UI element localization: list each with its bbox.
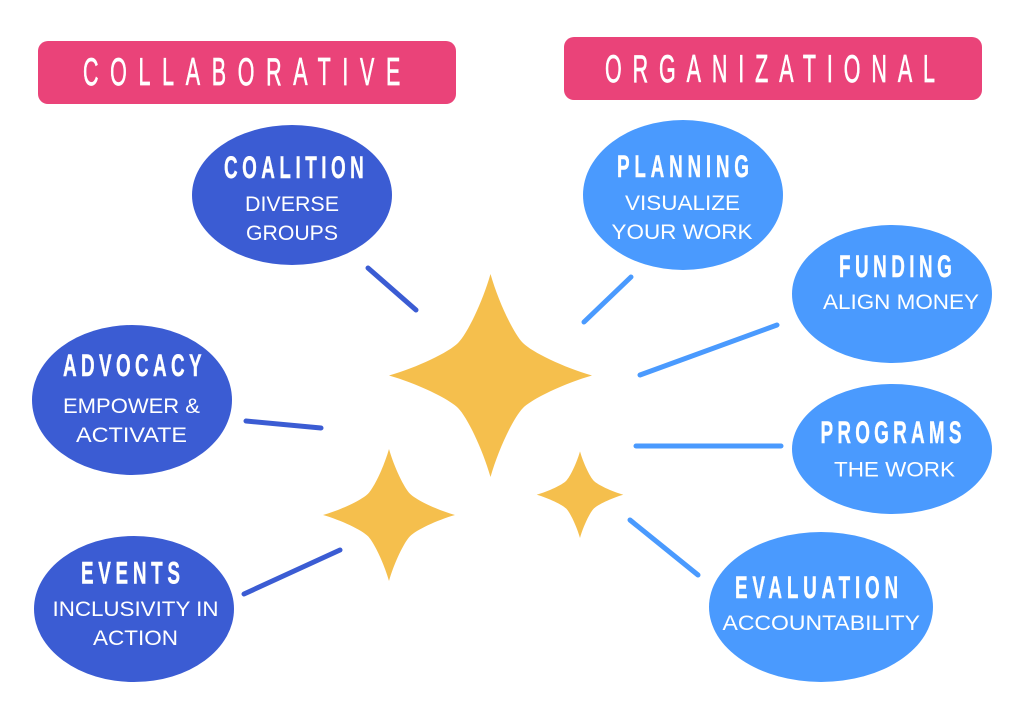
heading: coalition: COALITION — [224, 149, 364, 185]
node: advocacy — [32, 325, 232, 475]
node: coalition — [192, 125, 392, 265]
body: diverse groups: GROUPS — [246, 222, 338, 245]
node: evaluation — [709, 532, 933, 682]
body: accountability: ACCOUNTABILITY — [722, 612, 920, 635]
icon: large star — [389, 274, 592, 477]
node: events — [34, 536, 234, 682]
icon: small star — [537, 451, 623, 538]
body: inclusivity in action — [52, 598, 218, 650]
banner title: organizational: ORGANIZATIONAL — [605, 47, 935, 91]
node: programs — [792, 384, 992, 514]
heading: programs: PROGRAMS — [820, 414, 962, 450]
heading: funding: FUNDING — [839, 248, 952, 284]
body: visualize your work: VISUALIZE — [625, 192, 740, 215]
banner title: collaborative: COLLABORATIVE — [83, 50, 400, 94]
body: inclusivity in action: INCLUSIVITY IN — [52, 598, 218, 621]
node: funding — [792, 225, 992, 363]
heading: evaluation: EVALUATION — [735, 569, 898, 605]
connector lines: collaborative — [244, 268, 416, 594]
body: empower and activate: EMPOWER & — [63, 395, 200, 418]
body: visualize your work — [612, 192, 752, 244]
body: diverse groups: DIVERSE — [245, 193, 339, 216]
body: empower and activate: ACTIVATE — [76, 424, 187, 447]
heading: advocacy: ADVOCACY — [63, 347, 202, 383]
body: diverse groups — [245, 193, 339, 245]
connector lines: organizational — [584, 277, 781, 575]
banner: collaborative — [38, 41, 456, 104]
heading: events: EVENTS — [81, 554, 180, 591]
body: align money: ALIGN MONEY — [823, 291, 979, 314]
node: planning — [583, 120, 783, 270]
body: inclusivity in action: ACTION — [93, 627, 178, 650]
banner: organizational — [564, 37, 982, 100]
icon: medium star — [323, 449, 455, 581]
body: visualize your work: YOUR WORK — [612, 221, 752, 244]
body: empower and activate — [63, 395, 200, 447]
heading: planning: PLANNING — [617, 148, 749, 184]
body: the work: THE WORK — [834, 458, 955, 482]
